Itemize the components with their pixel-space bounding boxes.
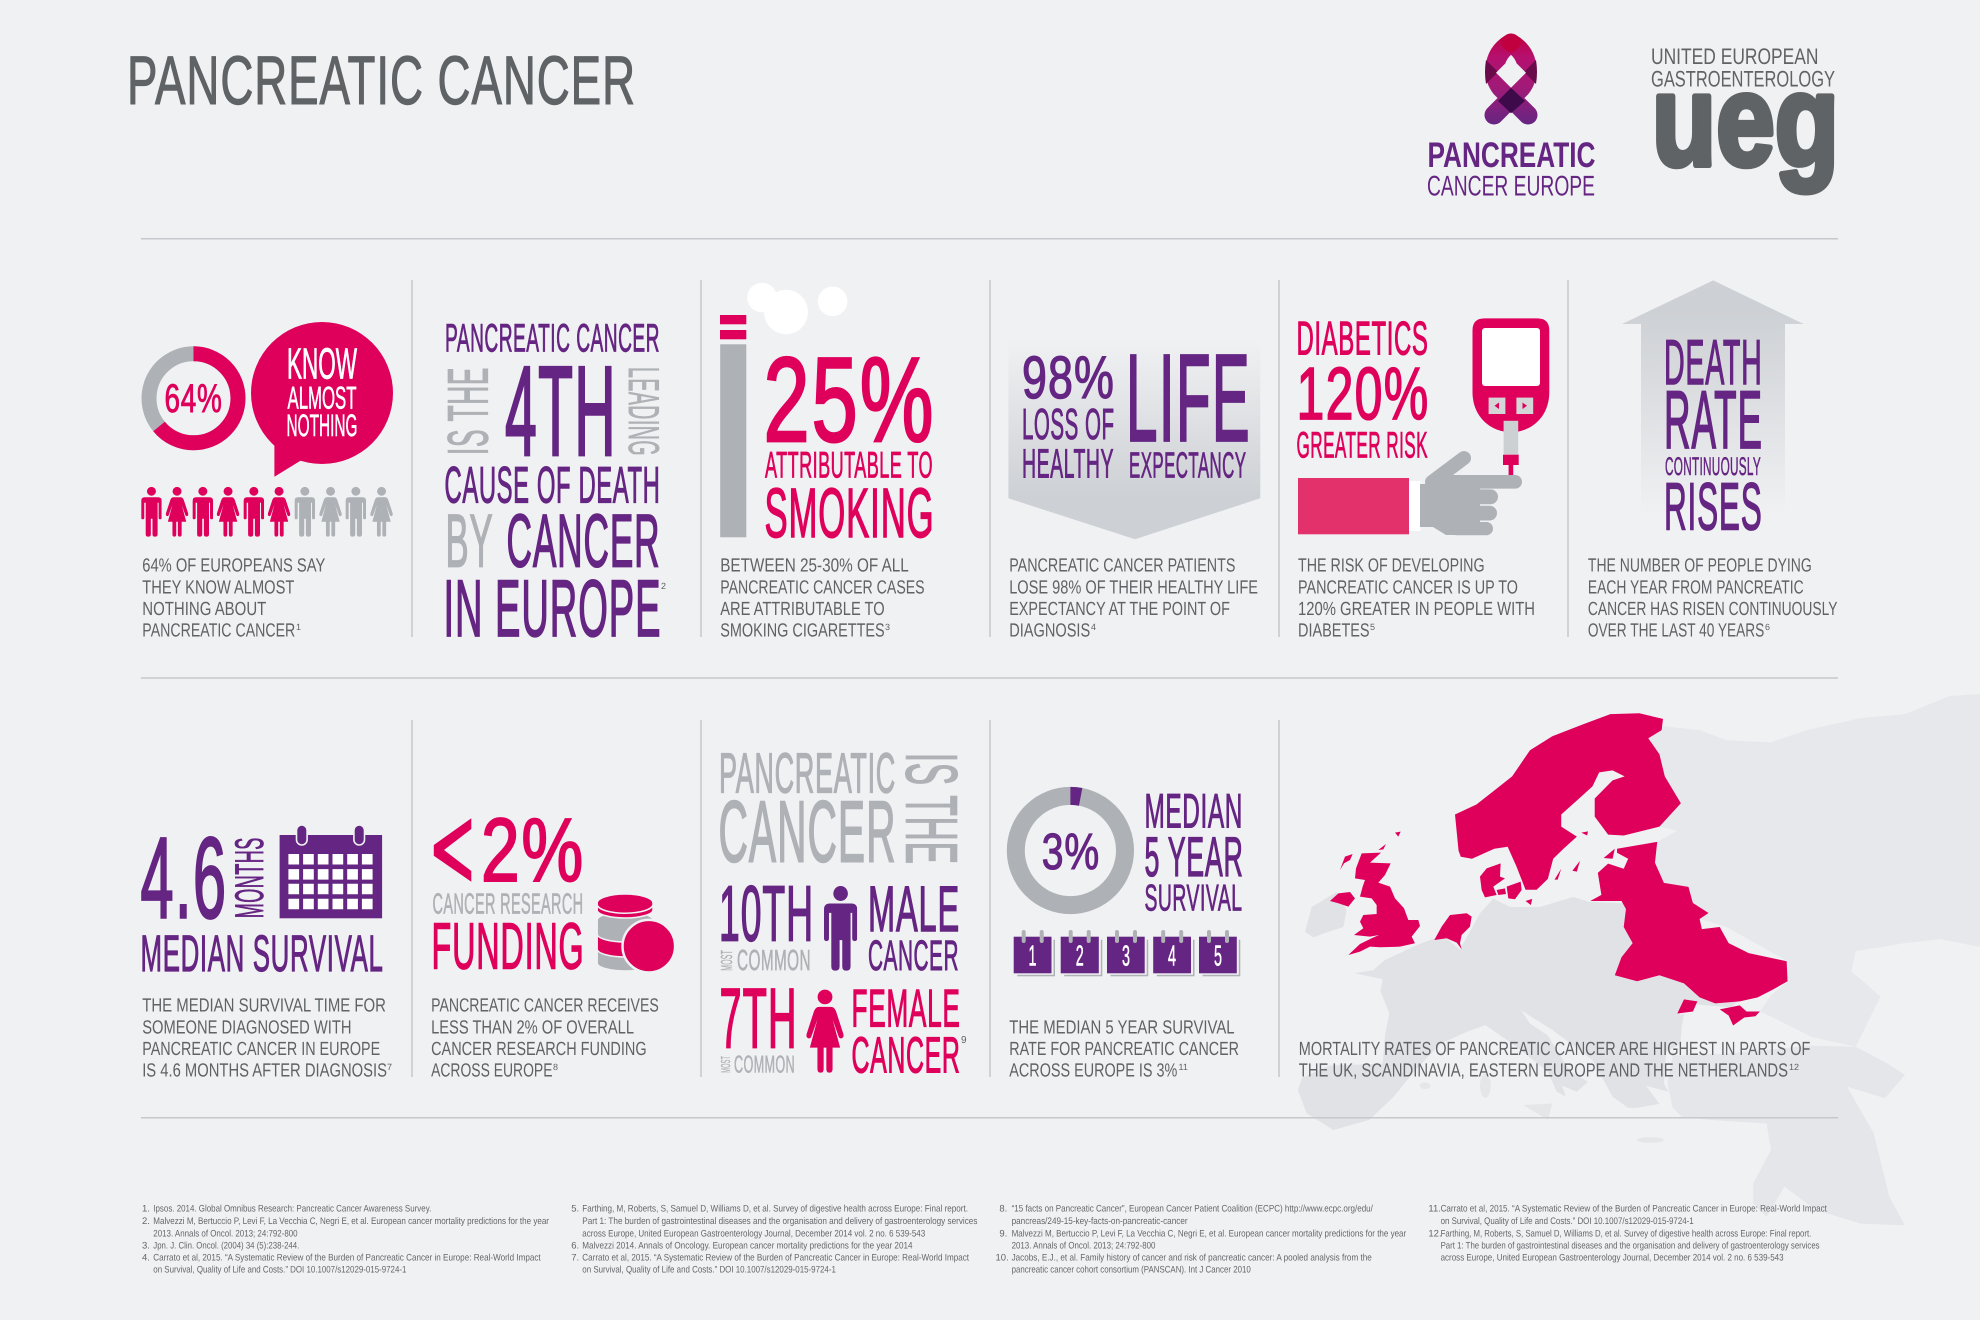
statistic: 10th male cancer: 10TH [719,870,814,958]
statistic: 7th female cancer: COMMON [734,1052,795,1079]
heading typography: CANCER [718,784,896,881]
text block: PANCREATIC CANCER RECEIVES [431,996,659,1017]
panel: 10th male, 7th female cancer: CANCER [868,932,959,980]
speech bubble [251,322,393,477]
text: CAUSE OF DEATH [444,456,660,514]
statistic: 98% loss of healthy life expectancy: 98% [1022,344,1115,411]
text block [431,996,659,1082]
up arrow shape [1622,280,1804,515]
heading typography: PANCREATIC [719,742,896,805]
donut chart: 64% [149,354,238,443]
statistic: 4.6 months: 4.6 [140,814,228,942]
panel: research funding: FUNDING [432,909,584,982]
text block: 11 [1178,1062,1188,1072]
statistic: 10th male cancer: MALE [868,873,960,945]
references column 1: on Survival, Quality of Life and Costs.” DOI 10.1007/s12029-015-9724-1 [153,1264,406,1275]
text block: IS 4.6 MONTHS AFTER DIAGNOSIS [142,1061,387,1082]
text block: 1 [296,622,301,632]
statistic: less than 2%: CANCER RESEARCH [432,888,584,920]
references column 1: 4. [142,1252,150,1263]
text block: SOMEONE DIAGNOSED WITH [142,1017,352,1038]
icon: five calendar pages: 3 [1122,941,1130,973]
highlighted countries map [1330,713,1788,1026]
heading typography: IS THE [890,753,971,865]
text block: DIABETES [1298,621,1370,642]
icon: five calendar pages: 2 [1076,941,1084,973]
panel: 5 year survival [1009,784,1244,1082]
speech bubble: ALMOST [288,379,356,415]
statistic: 7th female cancer: 7TH [720,972,798,1067]
statistic: 120% greater risk: DIABETICS [1296,313,1428,366]
heading typography: LEADING [619,367,667,456]
statistic: 98% loss of healthy life expectancy: LOSS OF [1022,401,1114,449]
text block: NOTHING ABOUT [142,599,267,620]
statistic: 120% greater risk: 120% [1296,352,1430,435]
panel: life expectancy: EXPECTANCY [1129,444,1246,485]
logo: United European Gastroenterology: GASTROENTEROLOGY [1651,66,1835,92]
icon: calendar [280,825,382,918]
text block [142,556,326,642]
speech bubble: KNOW [287,340,357,388]
text block: 4 [1091,622,1096,632]
statistic: 7th female cancer: MOST [718,1056,733,1073]
heading typography [1144,784,1244,919]
references column 3: pancreatic cancer cohort consortium (PANSCAN). Int J Cancer 2010 [1012,1264,1251,1275]
text block: THE RISK OF DEVELOPING [1298,556,1485,577]
references column 1: Jpn. J. Clin. Oncol. (2004) 34 (5):238-244. [153,1240,299,1251]
references column 2: Carrato et al, 2015. “A Systematic Review of the Burden of Pancreatic Cancer in Europe: Real-World Impact [582,1252,969,1263]
statistic: 10th male cancer [719,870,960,980]
references column 3: 9. [999,1228,1007,1239]
heading typography: 2 [661,581,666,591]
references column 1: Ipsos. 2014. Global Omnibus Research: Pancreatic Cancer Awareness Survey. [153,1204,431,1215]
text block: THE MEDIAN SURVIVAL TIME FOR [142,996,386,1017]
references column 4: 11. [1428,1204,1441,1215]
Scandinavia and eastern Europe [1455,713,1788,1026]
statistic: less than 2% [432,801,585,982]
statistic: less than 2%: 2% [481,801,585,901]
icon: five calendar pages: 1 [1028,941,1036,973]
references column 2: across Europe, United European Gastroenterology Journal, December 2014 vol. 2 no. 6 539-543 [582,1228,925,1239]
references column 2: Malvezzi 2014. Annals of Oncology. European cancer mortality predictions for the year 2014 [582,1240,912,1251]
heading typography: IS THE [436,367,500,455]
map caption: THE UK, SCANDINAVIA, EASTERN EUROPE AND THE NETHERLANDS [1299,1060,1788,1082]
text: IN EUROPE [444,564,662,654]
down arrow shape [1008,340,1260,539]
statistic: 4.6 months: MONTHS [228,837,272,918]
statistic: 25% [764,333,936,552]
icon: hand with sleeve [1298,458,1522,535]
references column 1: 2. [142,1216,150,1227]
references column 2: Part 1: The burden of gastrointestinal diseases and the organisation and delivery of gastroenterology services [582,1216,978,1227]
map caption: 12 [1789,1062,1799,1072]
text block: PANCREATIC CANCER CASES [720,577,925,598]
references column 1: 3. [142,1240,150,1251]
heading typography [1664,328,1763,544]
heading typography: 4TH [505,341,617,483]
statistic: 4.6 months [140,814,384,982]
statistic: 98% loss of healthy life expectancy: HEALTHY [1022,440,1114,486]
text block: ACROSS EUROPE [431,1061,552,1082]
logo: Pancreatic Cancer Europe [1427,34,1596,202]
text block: 8 [553,1062,558,1072]
references column 2: Farthing, M, Roberts, S, Samuel D, Williams D, et al. Survey of digestive health across Europe: Final report. [582,1204,968,1215]
text block: EXPECTANCY AT THE POINT OF [1009,599,1230,620]
map caption: MORTALITY RATES OF PANCREATIC CANCER ARE HIGHEST IN PARTS OF [1299,1039,1810,1060]
references column 3: Malvezzi M, Bertuccio P, Levi F, La Vecchia C, Negri E, et al. European cancer mortality predictions for the year [1012,1228,1406,1239]
text block: PANCREATIC CANCER [142,621,295,642]
text block [1588,556,1838,642]
text block: LESS THAN 2% OF OVERALL [431,1017,634,1038]
references column 2 [571,1204,978,1275]
text block: EACH YEAR FROM PANCREATIC [1588,577,1804,598]
text: CANCER [506,499,660,583]
references column 2: 7. [571,1252,579,1263]
text block: DIAGNOSIS [1009,621,1090,642]
statistic: 7th female cancer: CANCER [852,1026,960,1083]
references column 4 [1428,1204,1827,1263]
panel: 4th leading cause of death [436,317,667,654]
references column 1 [142,1204,549,1275]
references column 4: 12. [1428,1228,1442,1239]
text block: 3 [885,622,890,632]
text block [1009,1017,1239,1082]
panel: 64% know almost nothing [141,322,393,642]
statistic: 4.6 months: MEDIAN SURVIVAL [140,925,384,982]
text block: LOSE 98% OF THEIR HEALTHY LIFE [1009,577,1258,598]
background map of Europe [1298,694,1980,1225]
references column 3: Jacobs, E.J., et al. Family history of cancer and risk of pancreatic cancer: A pooled analysis from the [1012,1252,1372,1263]
icon: coins [597,894,675,972]
statistic: 98% loss of healthy life expectancy [1022,330,1251,486]
text: ATTRIBUTABLE TO [765,444,933,485]
heading typography: MEDIAN [1144,784,1243,838]
text block: PANCREATIC CANCER IS UP TO [1298,577,1518,598]
text block: THE NUMBER OF PEOPLE DYING [1588,556,1812,577]
panel: death rate rises: CONTINUOUSLY [1665,453,1761,481]
icon: ribbon [1485,34,1537,115]
text block: OVER THE LAST 40 YEARS [1588,621,1764,642]
donut chart: 3%: 3% [1042,823,1100,880]
donut chart: 64%: 64% [164,377,222,421]
text block: BETWEEN 25-30% OF ALL [720,556,909,577]
references column 4: Carrato et al, 2015. “A Systematic Review of the Burden of Pancreatic Cancer in Europe: Real-World Impact [1441,1204,1827,1215]
statistic: 120% greater risk [1296,313,1430,466]
references column 1: Malvezzi M, Bertuccio P, Levi F, La Vecchia C, Negri E, et al. European cancer mortality predictions for the year [153,1216,549,1227]
icon: five calendar pages: 5 [1214,941,1222,973]
panel: 10th male, 7th female cancer [718,742,971,1083]
references column 2: 5. [571,1204,579,1215]
panel: smoking 25% [720,283,936,642]
references column 3: 2013. Annals of Oncol. 2013; 24:792-800 [1012,1240,1155,1251]
text block: 7 [387,1062,392,1072]
logo: United European Gastroenterology: ueg [1652,47,1839,193]
references column 3: 10. [996,1252,1009,1263]
text block: ARE ATTRIBUTABLE TO [720,599,885,620]
panel: life expectancy [1008,330,1260,642]
text block: RATE FOR PANCREATIC CANCER [1009,1039,1239,1060]
icon: cigarette with smoke [720,283,847,537]
panel: death rate rises: DEATH [1664,328,1762,398]
references column 4: Farthing, M, Roberts, S, Samuel D, Williams D, et al. Survey of digestive health across Europe: Final report. [1441,1228,1811,1239]
panel: research funding [431,801,675,1082]
statistic: 10th male cancer: COMMON [737,945,811,977]
references column 2: 6. [571,1240,579,1251]
map caption [1299,1039,1810,1082]
references column 3: 8. [999,1204,1007,1215]
text: LIFE [1126,330,1251,468]
references column 1: 2013. Annals of Oncol. 2013; 24:792-800 [153,1228,298,1239]
panel: death rate rises: RATE [1664,375,1763,466]
text: SMOKING [764,474,934,552]
panel: death rate rises [1588,280,1838,642]
references column 3: “15 facts on Pancreatic Cancer”, European Cancer Patient Coalition (ECPC) http://www.ecpc.org/edu/ [1012,1204,1373,1215]
references column 2: on Survival, Quality of Life and Costs.” DOI 10.1007/s12029-015-9724-1 [582,1264,836,1275]
statistic: 25%: 25% [764,333,936,467]
panel: diabetics: GREATER RISK [1296,424,1428,466]
statistic: 7th female cancer: 9 [961,1035,967,1046]
logo: Pancreatic Cancer Europe: CANCER EUROPE [1427,170,1595,202]
text block [1009,556,1258,642]
references column 3 [996,1204,1406,1275]
text block: 5 [1370,622,1375,632]
references column 4: on Survival, Quality of Life and Costs.” DOI 10.1007/s12029-015-9724-1 [1441,1216,1694,1227]
text block [1298,556,1535,642]
icon: glucose meter [1472,318,1549,478]
heading typography [718,742,971,881]
text block: CANCER RESEARCH FUNDING [431,1039,647,1060]
references column 3: pancreas/249-15-key-facts-on-pancreatic-cancer [1012,1216,1188,1227]
icon: five calendar pages: 4 [1168,941,1176,973]
text block [720,556,925,642]
text block: SMOKING CIGARETTES [720,621,885,642]
references column 1: 1. [142,1204,150,1215]
panel: diabetics [1296,313,1549,642]
UK, Ireland, Netherlands, Denmark [1330,832,1522,955]
speech bubble: NOTHING [286,408,358,443]
donut chart: 3% [1016,796,1125,905]
text block: 6 [1765,622,1770,632]
heading typography [436,317,667,654]
heading typography: BY [446,499,494,583]
text block: PANCREATIC CANCER IN EUROPE [142,1039,380,1060]
text: 5 YEAR [1144,825,1244,888]
panel: death rate rises: RISES [1664,469,1762,544]
statistic: 10th male cancer: MOST [719,950,736,971]
heading typography: SURVIVAL [1144,877,1242,919]
text block [142,996,392,1082]
references column 1: Carrato et al, 2015. “A Systematic Review of the Burden of Pancreatic Cancer in Europe: Real-World Impact [153,1252,541,1263]
icon: five calendar pages [1014,932,1240,976]
statistic: 7th female cancer: FEMALE [852,980,960,1039]
text block: PANCREATIC CANCER PATIENTS [1009,556,1235,577]
text block: 64% OF EUROPEANS SAY [142,556,326,577]
references column 4: Part 1: The burden of gastrointestinal diseases and the organisation and delivery of gastroenterology services [1441,1240,1820,1251]
references column 4: across Europe, United European Gastroenterology Journal, December 2014 vol. 2 no. 6 539-543 [1441,1252,1784,1263]
logo: United European Gastroenterology: UNITED EUROPEAN [1651,44,1818,69]
text block: THEY KNOW ALMOST [142,577,295,598]
text block: 120% GREATER IN PEOPLE WITH [1298,599,1535,620]
text block: THE MEDIAN 5 YEAR SURVIVAL [1009,1017,1235,1038]
text: PANCREATIC CANCER [445,317,660,361]
pictogram: ten people [141,487,393,537]
logo wordmark: PANCREATIC [1428,135,1596,175]
text block: CANCER HAS RISEN CONTINUOUSLY [1588,599,1838,620]
panel: median survival [140,814,392,1082]
statistic: 7th female cancer [718,972,967,1083]
title: PANCREATIC CANCER [127,42,636,119]
text block: ACROSS EUROPE IS 3% [1009,1061,1177,1082]
